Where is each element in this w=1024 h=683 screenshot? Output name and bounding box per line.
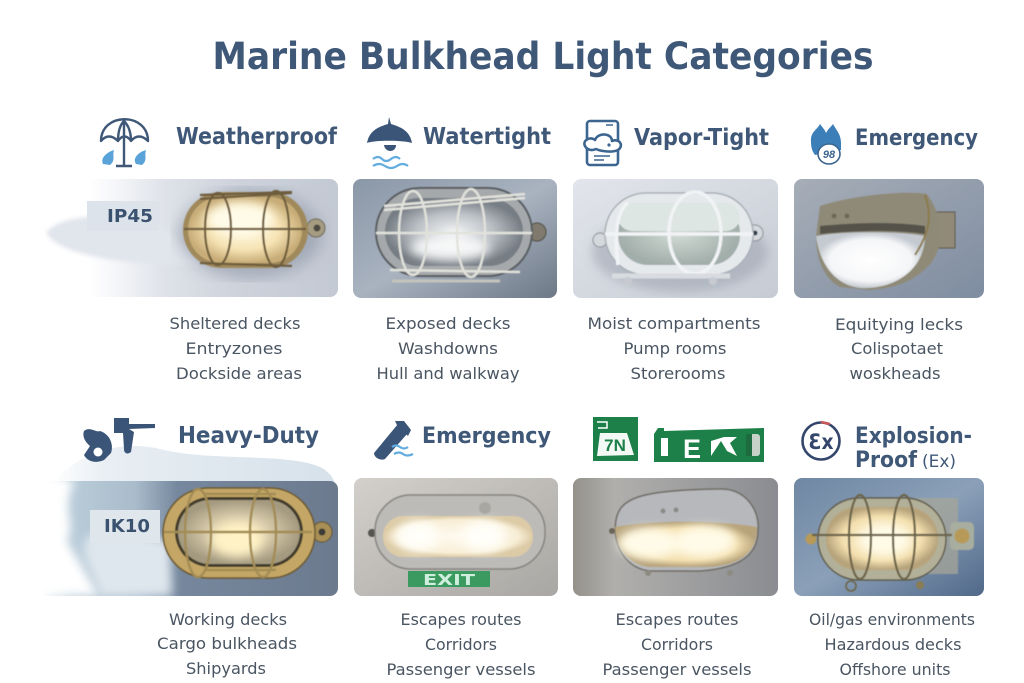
heading: Vapor-Tight: Vapor-Tight [634,125,769,151]
icon: flashlight [374,421,413,460]
decorative wash behind heavy-duty panel [50,446,338,520]
text: weatherproof uses: Dockside areas [176,364,302,383]
text: vapor-tight uses: Pump rooms [624,339,726,358]
icon: exit sign left [593,417,638,461]
heading: Weatherproof: Weatherproof [176,124,338,150]
icon: emergency drop: 98 [823,149,836,161]
panel: vapor-tight photo [573,179,778,298]
text: emergency uses: woskheads [850,364,940,383]
icon: Ex symbol [802,422,840,460]
icon: umbrella [101,119,148,166]
panel: watertight photo [353,179,557,298]
heading: Explosion-Proof: Explosion- [855,424,972,449]
sign: exit: EXIT [423,571,476,589]
heading: Emergency top: Emergency [855,126,978,151]
text: weatherproof uses: Entryzones [186,339,282,358]
icon: watertight lamp [367,117,412,168]
lamp: emergency grey [816,193,955,290]
text: weatherproof uses: Sheltered decks [170,314,300,333]
icon: exit sign left: 7N [604,436,626,455]
panel: weatherproof photo [46,179,338,297]
badge: IP45: IP45 [107,206,153,227]
panel: emergency top photo [794,179,984,298]
text: weatherproof uses [170,314,302,383]
heading: Explosion-Proof [855,424,972,473]
text: emergency uses: Colispotaet [851,339,943,358]
badge: IK10: IK10 [104,516,150,537]
text: vapor-tight uses [588,314,760,383]
lamp: brass weatherproof [178,190,325,278]
text: emergency lower uses: Corridors [425,635,497,654]
icon: emergency drop [811,124,841,164]
text: emergency lower uses [386,610,536,679]
text: watertight uses: Exposed decks [386,314,510,333]
text: escape route uses [602,610,752,679]
lamp: steel watertight [376,188,546,281]
sign: exit [408,571,490,589]
text: heavy-duty uses: Shipyards [186,659,266,678]
text: watertight uses: Hull and walkway [376,364,520,383]
text: heavy-duty uses: Working decks [169,610,287,629]
lamp: emergency exit [368,495,545,569]
panel: emergency exit photo [354,478,558,596]
text: emergency lower uses: Escapes routes [400,610,522,629]
heading: Explosion-Proof: (Ex) [922,452,956,472]
ip45 smudge [46,216,200,266]
heading: Heavy-Duty: Heavy-Duty [178,423,319,449]
text: watertight uses: Washdowns [398,339,498,358]
text: escape route uses: Passenger vessels [602,660,752,679]
text: escape route uses: Escapes routes [616,610,738,629]
text: vapor-tight uses: Storerooms [630,364,726,383]
lamp: explosion-proof [806,495,974,591]
text: vapor-tight uses: Moist compartments [588,314,760,333]
icon: vapor device [584,121,621,165]
lamp: warm bulkhead [609,489,758,576]
icon: heavy-duty wrench [83,418,155,462]
lamp: white vapor-tight [592,192,768,292]
text: watertight uses [376,314,520,383]
title: Marine Bulkhead Light Categories [212,35,874,78]
text: explosion-proof uses: Oil/gas environments [809,610,975,629]
text: explosion-proof uses: Hazardous decks [824,635,962,654]
text: escape route uses: Corridors [641,635,713,654]
heading: Explosion-Proof: Proof [855,448,917,473]
text: explosion-proof uses [809,610,975,679]
text: explosion-proof uses: Offshore units [840,660,950,679]
text: heavy-duty uses [157,610,297,678]
icon: exit sign right [654,428,764,464]
text: emergency uses: Equitying lecks [835,315,963,334]
icon: Ex symbol: Ɛx [808,430,834,454]
heading: Emergency lower: Emergency [422,424,551,449]
text: emergency uses [835,315,963,383]
heading: Watertight: Watertight [423,124,551,150]
lamp: brass heavy-duty [163,488,332,578]
text: emergency lower uses: Passenger vessels [386,660,536,679]
panel: heavy-duty photo [48,481,338,596]
icon: exit sign right: E [683,434,701,464]
panel: escape route photo [573,478,778,596]
panel: explosion-proof photo [794,478,984,596]
text: heavy-duty uses: Cargo bulkheads [157,634,297,653]
